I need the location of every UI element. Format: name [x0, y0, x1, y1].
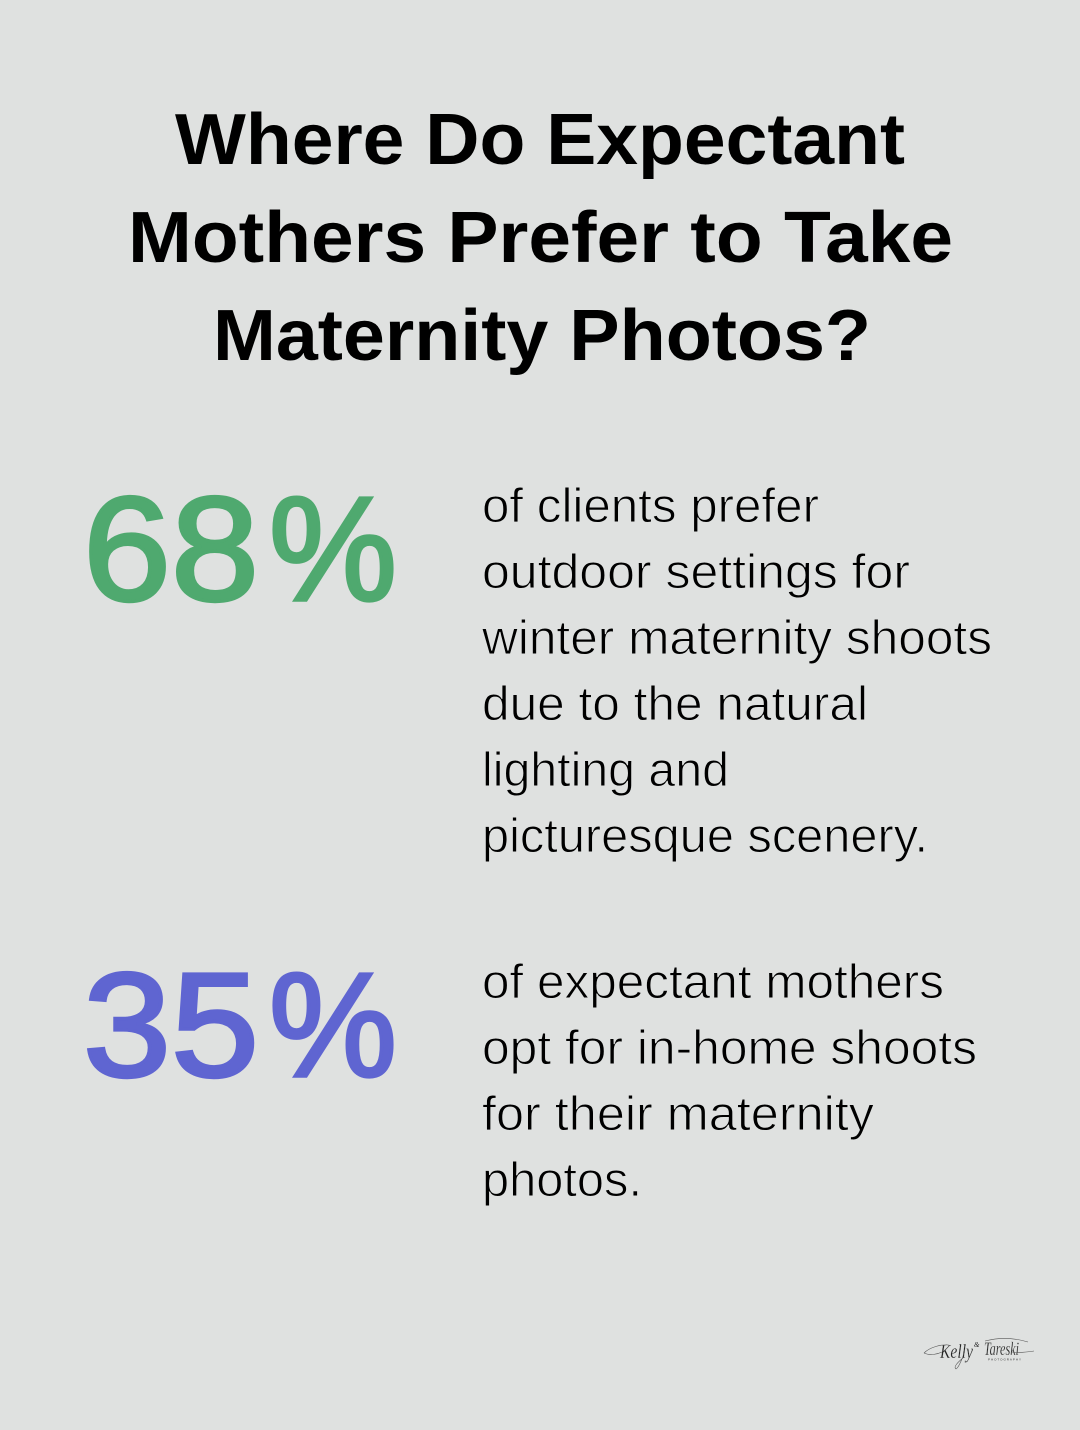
- title: Where Do Expectant: [175, 100, 905, 180]
- text block: outdoor settings: winter maternity shoots: [481, 612, 992, 665]
- text block: outdoor settings: outdoor settings for: [482, 546, 910, 599]
- text block: in-home shoots: opt for in-home shoots: [482, 1022, 977, 1075]
- text block: outdoor settings: picturesque scenery.: [482, 810, 928, 863]
- logo: signature: Kelly: [939, 1341, 973, 1363]
- statistic: 35 percent: 35: [83, 943, 259, 1108]
- text block: outdoor settings: due to the natural: [482, 678, 868, 731]
- title: Maternity Photos?: [213, 296, 871, 376]
- statistic: 68 percent: %: [269, 467, 397, 632]
- title: [128, 100, 953, 376]
- logo: signature: Tareski: [984, 1339, 1019, 1360]
- statistic: 68 percent: 68: [83, 467, 259, 632]
- title: Mothers Prefer to Take: [128, 198, 953, 278]
- text block: in-home shoots: photos.: [482, 1154, 642, 1207]
- text block: outdoor settings: [481, 480, 992, 863]
- text block: in-home shoots: [482, 956, 977, 1207]
- text block: in-home shoots: for their maternity: [482, 1088, 874, 1141]
- statistic: 35 percent: %: [269, 943, 397, 1108]
- logo: signature: PHOTOGRAPHY: [988, 1358, 1021, 1362]
- text block: outdoor settings: of clients prefer: [482, 480, 819, 533]
- logo: signature: [924, 1338, 1034, 1369]
- text block: in-home shoots: of expectant mothers: [482, 956, 944, 1009]
- logo: signature: &: [974, 1341, 980, 1349]
- text block: outdoor settings: lighting and: [482, 744, 729, 797]
